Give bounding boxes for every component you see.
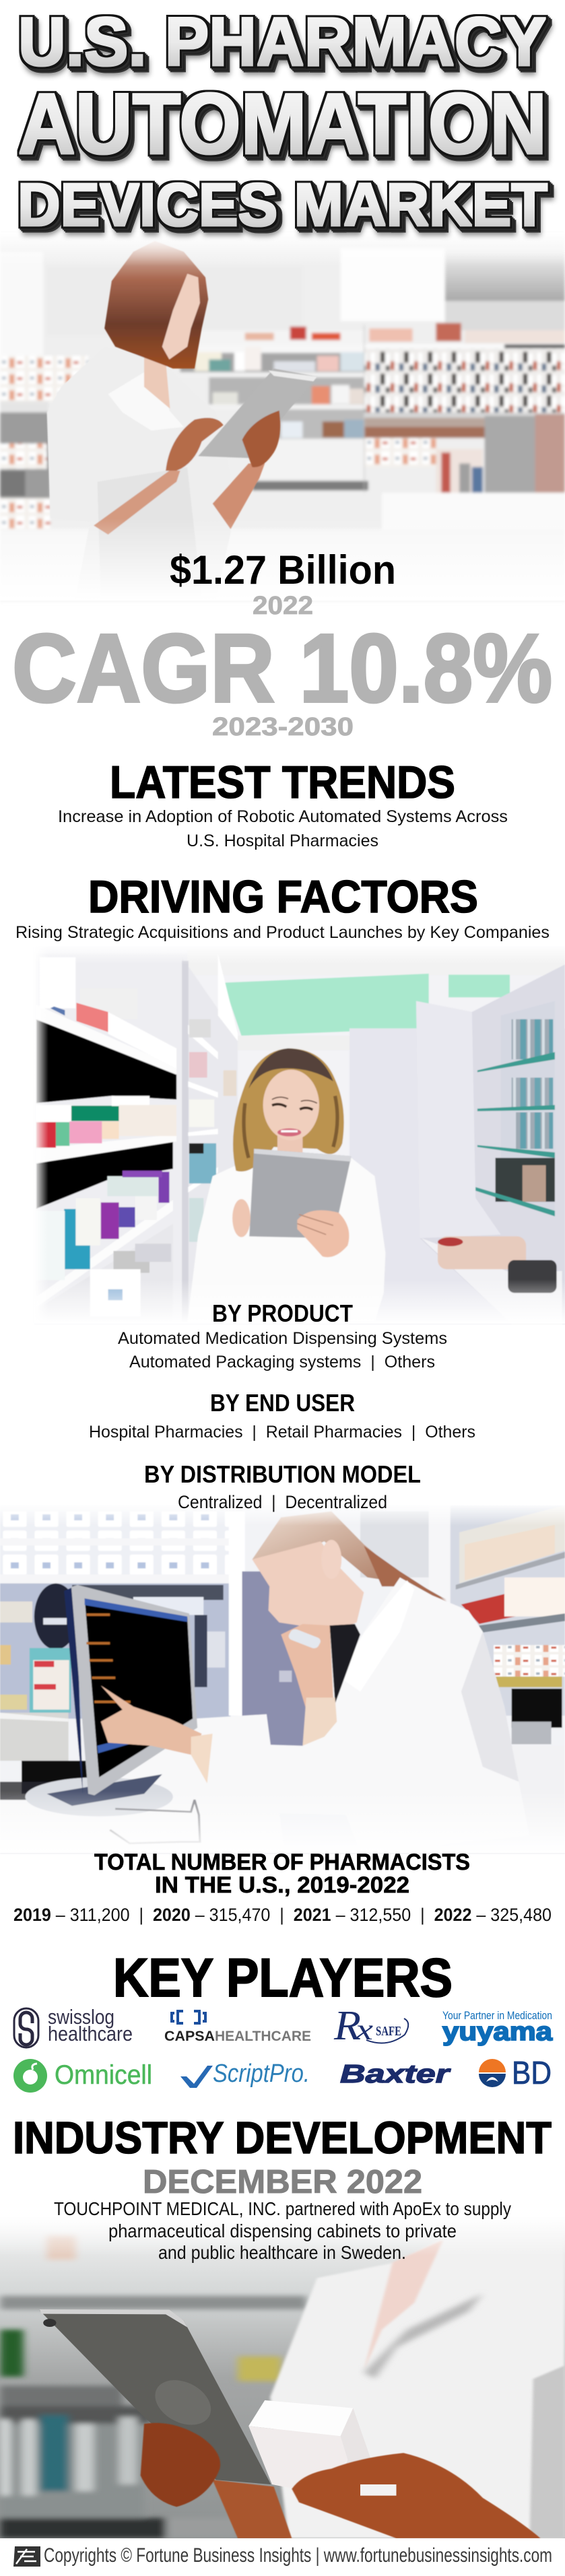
development description <box>54 2198 511 2263</box>
logo: capsa healthcare: CAPSA <box>164 2029 215 2044</box>
logo: Rx safe <box>333 2003 408 2049</box>
pharmacist numbers by year: 2019 – 311,200 | 2020 – 315,470 | 2021 – 312,550 | 2022 – 325,480 <box>13 1905 552 1925</box>
by distribution model items: Centralized | Decentralized <box>178 1492 387 1512</box>
development description: TOUCHPOINT MEDICAL, INC. partnered with ApoEx to supply <box>54 2198 511 2219</box>
icon: fortune business insights logo <box>13 2546 40 2567</box>
title: U.S. PHARMACY <box>18 3 546 80</box>
heading: total number of pharmacists <box>94 1850 470 1898</box>
logo: capsa healthcare <box>164 2011 311 2044</box>
heading: total number of pharmacists: TOTAL NUMBER OF PHARMACISTS <box>94 1850 470 1875</box>
logo: baxter: Baxter <box>340 2060 451 2089</box>
development description: pharmaceutical dispensing cabinets to private <box>108 2221 457 2241</box>
logo: omnicell: Omnicell <box>55 2060 152 2090</box>
heading: by end user: BY END USER <box>210 1389 355 1417</box>
by end user items: Hospital Pharmacies | Retail Pharmacies | Others <box>89 1423 475 1442</box>
latest trends text: U.S. Hospital Pharmacies <box>187 832 378 850</box>
by product items <box>118 1329 447 1371</box>
photo: hands holding tablet and medicine box <box>0 2215 565 2576</box>
woman <box>187 1158 385 1322</box>
logo: yuyama: yuyama <box>442 2018 553 2046</box>
logo: scriptpro: ScriptPro. <box>213 2060 310 2088</box>
left shelves <box>34 953 187 1322</box>
heading: latest trends: LATEST TRENDS <box>110 757 455 808</box>
latest trends text <box>58 807 508 850</box>
monitor <box>25 1777 173 1817</box>
forecast period: 2023-2030 <box>212 713 354 741</box>
by product items: Automated Packaging systems | Others <box>129 1353 435 1371</box>
heading: by distribution model: BY DISTRIBUTION MODEL <box>144 1460 421 1488</box>
title: DEVICES MARKET <box>18 172 547 239</box>
heading: total number of pharmacists: IN THE U.S., 2019-2022 <box>155 1872 409 1898</box>
logo: scriptpro <box>180 2060 310 2088</box>
glasses <box>110 1800 200 1843</box>
woman <box>252 1512 446 1600</box>
logo: swisslog healthcare <box>14 2005 133 2047</box>
heading: driving factors: DRIVING FACTORS <box>88 871 478 922</box>
title <box>18 3 547 239</box>
logo: swisslog healthcare: swisslog <box>48 2005 114 2029</box>
photo: pharmacist between shelves <box>34 943 565 1324</box>
logo: Rx safe: x <box>355 2013 374 2046</box>
logo: omnicell <box>13 2059 152 2093</box>
logo: Rx safe: R <box>333 2003 361 2049</box>
latest trends text: Increase in Adoption of Robotic Automated Systems Across <box>58 807 508 826</box>
photo: pharmacist at computer monitor <box>0 1503 565 1854</box>
logo: BD <box>479 2056 552 2091</box>
market size value: $1.27 Billion <box>170 547 396 592</box>
heading: key players: KEY PLAYERS <box>113 1948 453 2008</box>
market size year: 2022 <box>253 592 313 620</box>
second shelving column <box>182 957 238 1322</box>
logo: yuyama <box>442 2009 553 2046</box>
logo: swisslog healthcare: healthcare <box>48 2022 133 2045</box>
logo: capsa healthcare: HEALTHCARE <box>215 2029 311 2044</box>
development date: DECEMBER 2022 <box>143 2164 422 2200</box>
desk <box>0 1713 69 1761</box>
logo: BD: BD <box>512 2056 552 2091</box>
logo: Rx safe: SAFE <box>376 2024 401 2039</box>
by product items: Automated Medication Dispensing Systems <box>118 1329 447 1348</box>
heading: by product: BY PRODUCT <box>212 1299 353 1327</box>
driving factors text: Rising Strategic Acquisitions and Product Launches by Key Companies <box>15 923 550 942</box>
development description: and public healthcare in Sweden. <box>158 2242 406 2263</box>
photo: pharmacist with tablet in pharmacy <box>0 232 565 602</box>
